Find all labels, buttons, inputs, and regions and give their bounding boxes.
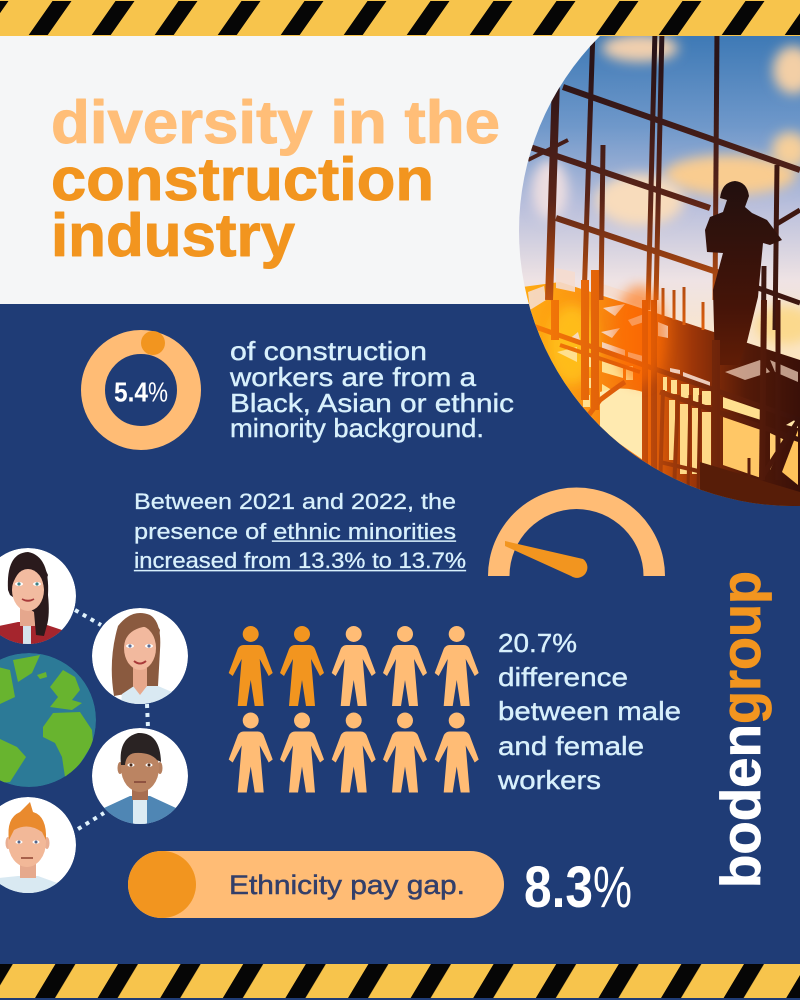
pill: ethnicity pay gap <box>128 851 504 918</box>
text: share of workers: minority background. <box>230 413 484 443</box>
logo: bodengroup: group <box>709 571 772 724</box>
avatars and globe network <box>0 548 188 895</box>
pictogram: ten workers, two highlighted <box>229 626 479 792</box>
glow <box>614 285 666 385</box>
stat: 8.3%: % <box>593 855 632 920</box>
avatar: dark-skinned man <box>92 728 188 826</box>
text: gender difference: between male <box>498 696 681 726</box>
text: share of workers: workers are from a <box>229 362 477 392</box>
gauge <box>488 487 665 578</box>
text: ethnic minorities increase: presence of ethnic minorities <box>134 519 456 544</box>
photo: worker on scaffolding <box>510 30 800 520</box>
donut chart: 5.4%: % <box>148 376 168 408</box>
title: industry <box>51 202 296 269</box>
lower tubes <box>530 270 800 490</box>
lower scaffolding mass <box>515 282 800 520</box>
title: diversity in the <box>51 89 500 156</box>
stat: 8.3%: 8.3 <box>524 855 593 920</box>
worker silhouette <box>705 181 782 365</box>
text: gender difference: workers <box>497 765 601 795</box>
globe <box>0 653 96 787</box>
text: gender difference: and female <box>498 731 644 761</box>
hazard stripe: top <box>0 0 800 36</box>
title <box>51 89 500 269</box>
scaffold tubes <box>528 30 800 330</box>
title: construction <box>51 146 434 213</box>
dark deck base <box>700 462 800 506</box>
avatar: dark-haired woman <box>0 548 76 645</box>
logo: bodengroup <box>709 571 772 888</box>
text: share of workers <box>229 336 514 443</box>
text: share of workers: Black, Asian or ethnic <box>230 388 514 418</box>
avatar: brown-haired woman <box>92 608 188 710</box>
platform mesh <box>528 268 710 386</box>
text: share of workers: of construction <box>230 336 427 366</box>
donut chart: 5.4%: 5.4 <box>114 376 148 408</box>
logo: bodengroup: boden <box>709 724 772 888</box>
text: ethnic minorities increase: increased from 13.3% to 13.7% <box>134 548 466 573</box>
text: gender difference: 20.7% <box>498 628 577 658</box>
donut chart: 5.4% <box>93 331 189 438</box>
pill: ethnicity pay gap: Ethnicity pay gap. <box>229 870 465 900</box>
header panel <box>0 36 800 304</box>
text: gender difference: difference <box>498 662 628 692</box>
avatar: red-haired man <box>0 797 76 895</box>
hazard stripe: bottom <box>0 964 800 998</box>
connector dots <box>75 610 148 829</box>
text: ethnic minorities increase <box>134 489 466 573</box>
text: gender difference <box>497 628 681 795</box>
text: ethnic minorities increase: Between 2021 and 2022, the <box>134 489 456 514</box>
